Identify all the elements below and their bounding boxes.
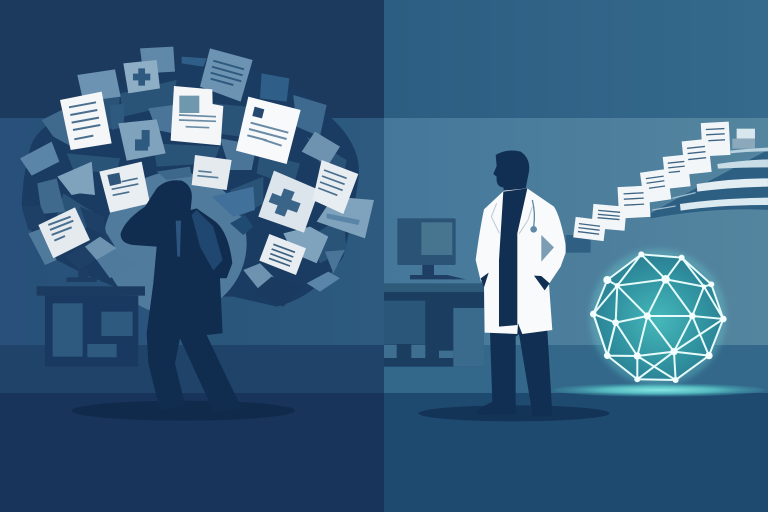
document: photo sheet (99, 162, 150, 213)
document: lower text sheet (259, 234, 306, 275)
document: large medical cross (258, 171, 319, 233)
desk with monitor base (37, 268, 145, 367)
swirling document cloud (20, 47, 374, 421)
dark cloud backdrop (22, 60, 359, 307)
glowing network sphere (590, 249, 727, 386)
document: image report sheet (171, 86, 223, 145)
pockets (481, 273, 550, 290)
document: folder icon sheet (118, 119, 166, 161)
sphere edges (593, 254, 723, 380)
doctor legs (477, 323, 552, 417)
white coat (476, 188, 567, 334)
motion streaks (651, 148, 768, 218)
stethoscope (530, 200, 537, 233)
doc 2 (591, 204, 627, 231)
doc 8 (732, 129, 755, 149)
doc 5 (663, 154, 691, 189)
document: lines on blue (211, 61, 244, 85)
doc 1 (573, 217, 606, 241)
floor shadow under doctor (418, 405, 610, 421)
doc 6 (682, 139, 712, 175)
dark shirt (499, 188, 527, 327)
document: right text sheet (313, 160, 358, 214)
document: tilted note (38, 207, 90, 258)
sphere halo (590, 249, 726, 386)
doc 4 (640, 169, 671, 203)
right scene (384, 122, 768, 421)
panel: overwhelmed side background (0, 0, 384, 512)
dark block behind first document (566, 235, 591, 253)
floor shadow under figure (72, 401, 295, 421)
desk and computer (384, 218, 484, 367)
panel: clear side background (384, 0, 768, 512)
sphere body (593, 254, 723, 380)
floor glow (553, 383, 765, 397)
document: note card (192, 155, 232, 190)
doc 3 (618, 186, 650, 218)
stressed man silhouette (121, 180, 242, 413)
documents staircase (573, 122, 755, 241)
document: small medical cross (123, 60, 160, 93)
lapels (491, 203, 532, 234)
mid-tone bands in the cloud (57, 80, 347, 263)
light circle behind figure (103, 172, 247, 315)
doc 7 (701, 122, 730, 156)
doctor head (493, 151, 529, 192)
coat shading (541, 235, 554, 262)
document: large profile sheet (236, 97, 301, 164)
document: white text sheet (60, 92, 112, 150)
sphere nodes (590, 251, 727, 383)
background papers (20, 47, 374, 307)
doctor figure (476, 151, 567, 417)
